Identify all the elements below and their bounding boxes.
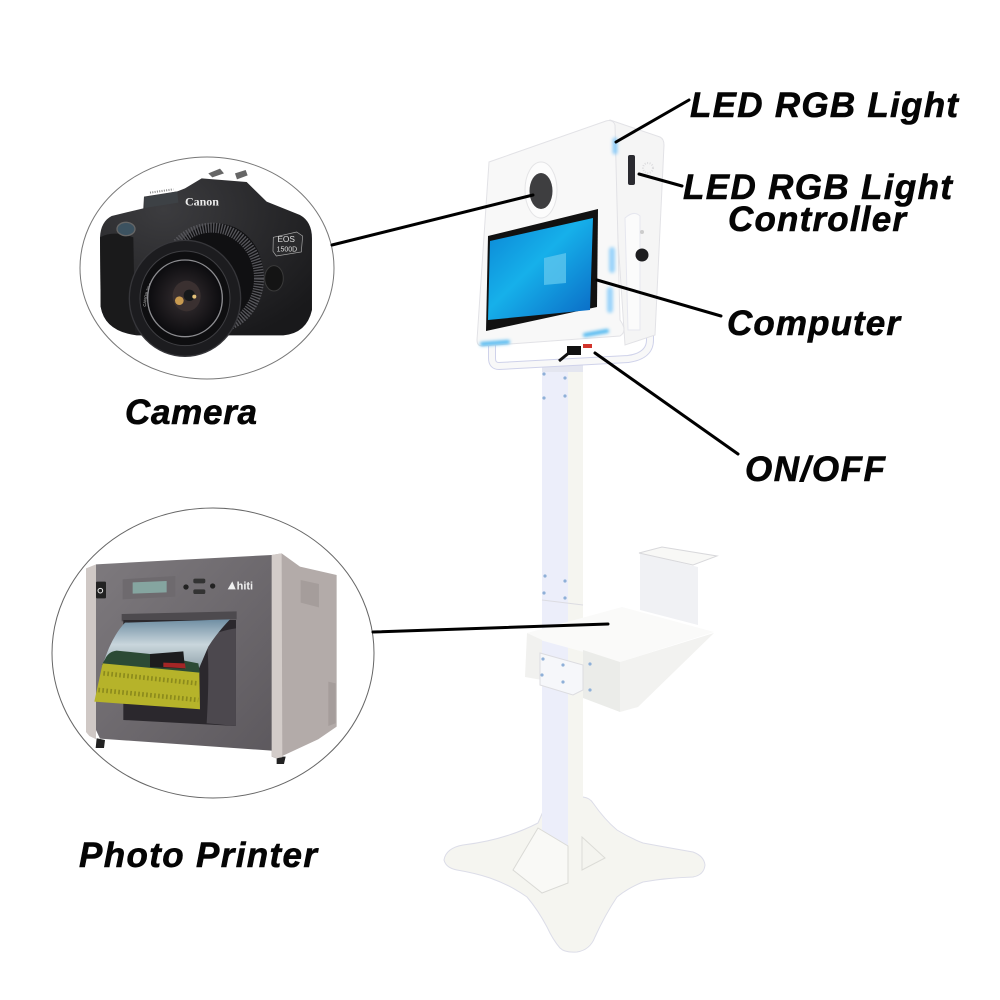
line: controller [639, 174, 682, 186]
icon: DSLR camera: 1500D [277, 246, 297, 253]
screen display [488, 218, 593, 320]
controller button [628, 155, 635, 185]
base plate [444, 797, 705, 952]
label: ON/OFF: ON/OFF [745, 450, 887, 489]
icon: photo printer [86, 553, 337, 764]
label: Camera: Camera [125, 393, 257, 432]
line: LED light [616, 100, 689, 142]
printer shelf [525, 372, 717, 712]
pole base bracket [513, 828, 568, 893]
icon: DSLR camera: CANON ZOOM LENS EF-S 18-55mm 1:4-5.6 IS II [143, 269, 210, 306]
line: camera [332, 195, 533, 245]
LED glow strips [482, 140, 615, 344]
line: on/off [595, 353, 738, 454]
shelf top tray [639, 547, 717, 565]
screen bezel [486, 209, 598, 331]
circle outline: camera [80, 157, 334, 379]
shelf upright [640, 553, 698, 625]
label: LED RGB Light: LED RGB Light [690, 86, 959, 125]
icon: DSLR camera: EOS [277, 234, 295, 244]
pole clamp [540, 653, 583, 695]
shelf top [527, 607, 714, 662]
icon: photo printer: hiti [237, 580, 253, 592]
label: LED RGB Light Controller [683, 168, 953, 239]
circle outline: printer [52, 508, 374, 798]
shelf left wing [525, 633, 542, 680]
knob [636, 248, 648, 262]
shelf front face [583, 650, 620, 712]
speaker dots [643, 163, 653, 173]
panel: camera circle [80, 156, 334, 380]
leader lines [332, 100, 738, 632]
side panel [610, 120, 664, 345]
camera opening [530, 173, 552, 209]
pole right face [568, 365, 583, 884]
side arm [625, 213, 640, 330]
icon: DSLR camera: Canon [185, 194, 219, 208]
booth head [477, 120, 664, 366]
handle bracket [492, 326, 650, 366]
power switch and cables [567, 346, 581, 355]
line: computer [597, 280, 721, 316]
panel: photo booth stand [444, 120, 717, 952]
icon: DSLR camera [100, 168, 312, 357]
lens ring [525, 162, 557, 218]
pole upper blue face [542, 365, 568, 846]
bolts [540, 372, 592, 692]
label: Computer: Computer [727, 304, 902, 343]
shelf body [620, 633, 714, 712]
label: LED RGB Light Controller: Controller [728, 200, 908, 239]
front panel [477, 120, 624, 346]
panel: printer circle [52, 508, 374, 798]
label: Photo Printer: Photo Printer [79, 836, 319, 875]
line: printer [373, 624, 608, 632]
label: LED RGB Light Controller: LED RGB Light [683, 168, 953, 207]
